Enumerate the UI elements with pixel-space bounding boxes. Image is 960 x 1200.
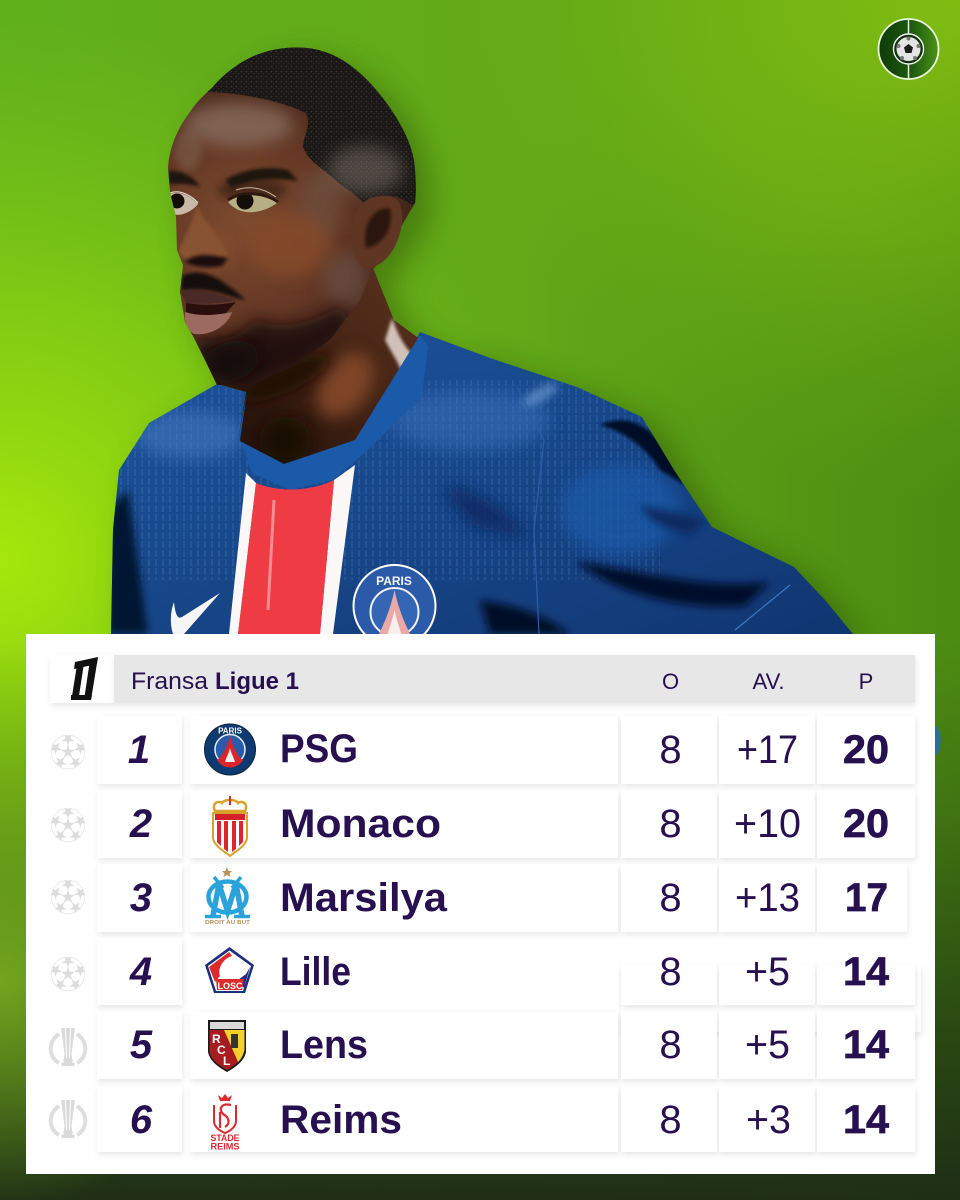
icon: Lille crest: LOSC (217, 981, 243, 991)
row 4: Lille (49, 938, 921, 1032)
row 6: Reims: 14 (843, 1098, 890, 1142)
row 2: Monaco: +10 (734, 802, 801, 846)
row 1: PSG (49, 716, 915, 784)
neck sweat highlight (385, 318, 412, 372)
row 1: PSG: 20 (843, 728, 889, 772)
icon: Lille crest (205, 947, 254, 993)
icon: Reims crest: STADE (210, 1133, 240, 1143)
row 4: Lille: 8 (659, 950, 682, 994)
row 6: Reims: +3 (746, 1098, 791, 1142)
player drop shadow (127, 59, 869, 644)
moustache (181, 273, 245, 300)
collar (238, 335, 428, 490)
row 1: PSG: 1 (128, 728, 150, 772)
row 3: Marsilya: Marsilya (280, 876, 448, 920)
column headers: O (662, 669, 679, 694)
header bar (114, 655, 915, 703)
row 3: Marsilya: 3 (130, 876, 152, 920)
head (168, 48, 416, 385)
PSG crest on shirt: PARIS (376, 574, 412, 588)
row 5: Lens: 5 (130, 1023, 153, 1067)
eye right (228, 188, 278, 212)
row 3: Marsilya: +13 (735, 876, 800, 920)
eye sockets (218, 177, 286, 203)
row 6: Reims: 6 (130, 1098, 153, 1142)
row 3: Marsilya: 17 (845, 876, 888, 920)
row 4: Lille: +5 (745, 950, 790, 994)
icon: Reims crest: REIMS (210, 1142, 240, 1152)
icon: Lens crest: C (217, 1043, 226, 1057)
table header (50, 655, 915, 703)
panel: league table card (26, 634, 935, 1174)
beard and chin (194, 305, 355, 392)
row 2: Monaco: Monaco (280, 802, 441, 846)
row 6: Reims: Reims (280, 1098, 402, 1142)
Nike swoosh (171, 593, 220, 634)
neck (217, 265, 428, 466)
row 3: Marsilya (49, 864, 907, 932)
icon: Lens crest: L (223, 1054, 230, 1068)
row 3: Marsilya: 8 (659, 876, 682, 920)
header title: Ligue 1 (215, 668, 299, 695)
row 2: Monaco (49, 790, 915, 858)
icon: Reims crest (210, 1094, 240, 1152)
row 4: Lille: 14 (843, 950, 890, 994)
nose shadow (178, 208, 226, 260)
row 2: Monaco: 2 (129, 802, 152, 846)
row 2: Monaco: 8 (659, 802, 682, 846)
icon: PSG crest: PARIS (218, 726, 243, 736)
column headers: AV. (752, 669, 784, 694)
row 4: Lille: Lille (280, 950, 351, 994)
icon: Monaco crest (213, 796, 247, 856)
icon: Marseille crest (205, 867, 251, 926)
ear (352, 196, 402, 268)
row 5: Lens: 8 (659, 1023, 682, 1067)
shirt (100, 330, 870, 640)
header title: Fransa (131, 668, 209, 695)
row 6: Reims: 8 (659, 1098, 682, 1142)
eyebrows (168, 171, 200, 187)
player photo illustration (100, 40, 870, 647)
lips (180, 290, 236, 334)
header title (131, 668, 299, 695)
hand sliver at right (935, 724, 941, 757)
header logo cell (50, 655, 114, 703)
icon: champions league ball (49, 956, 87, 991)
row 5: Lens: 14 (843, 1023, 890, 1067)
column headers: P (859, 669, 873, 694)
logo: football channel badge (878, 19, 938, 79)
row 1: PSG: +17 (737, 728, 798, 772)
centre stripe (229, 465, 355, 634)
icon: Lens crest: R (212, 1032, 221, 1046)
icon: Marseille crest: DROIT AU BUT (205, 920, 251, 926)
icon: Lens crest (208, 1020, 246, 1072)
icon: champions league ball (49, 879, 87, 914)
icon: conference league trophy (51, 1028, 85, 1066)
hair (205, 47, 417, 206)
row 1: PSG: 8 (659, 728, 682, 772)
row 2: Monaco: 20 (843, 802, 889, 846)
eye left (170, 192, 198, 215)
row 5: Lens: +5 (745, 1023, 790, 1067)
icon: PSG crest (204, 724, 256, 775)
icon: champions league ball (49, 734, 87, 769)
row 5: Lens (51, 1012, 915, 1079)
icon: conference league trophy (51, 1100, 85, 1138)
icon: champions league ball (49, 807, 87, 842)
PSG crest on shirt (352, 564, 436, 634)
row 4: Lille: 4 (129, 950, 152, 994)
forehead highlight (183, 103, 293, 147)
row 1: PSG: PSG (280, 727, 358, 771)
column headers (662, 669, 873, 694)
row 6: Reims (51, 1086, 915, 1152)
row 5: Lens: Lens (280, 1023, 368, 1067)
